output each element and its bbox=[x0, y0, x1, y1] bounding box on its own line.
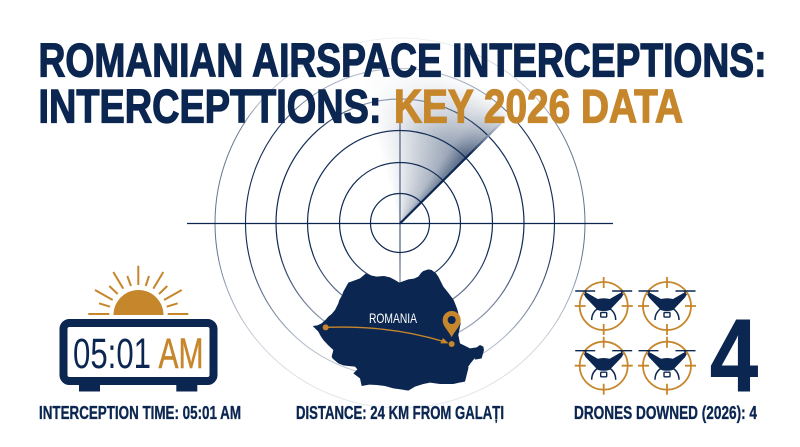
panel: distance map bbox=[296, 269, 504, 423]
icon: digital clock bbox=[64, 323, 214, 392]
radar sweep arm bbox=[400, 121, 503, 224]
route arrow bbox=[323, 324, 455, 347]
clock time digits: 05:01 bbox=[73, 330, 151, 378]
panel: drones downed bbox=[574, 277, 758, 423]
clock AM label: AM bbox=[158, 330, 204, 378]
radar horizontal axis bbox=[187, 222, 613, 224]
big number: 4 bbox=[710, 298, 758, 413]
radar rings and crosshair bbox=[215, 38, 585, 408]
icon: rising sun bbox=[88, 266, 188, 315]
icon: targeted drones bbox=[575, 277, 696, 395]
distance label: DISTANCE: 24 KM FROM GALAȚI bbox=[296, 403, 504, 423]
panel: interception time bbox=[39, 266, 241, 423]
title: INTERCEPTTIONS: bbox=[38, 80, 382, 132]
interception time label: INTERCEPTION TIME: 05:01 AM bbox=[39, 403, 241, 423]
map label: ROMANIA bbox=[369, 310, 417, 326]
radar sweep wedge bbox=[382, 79, 508, 222]
icon: location pin bbox=[443, 311, 461, 337]
map of Romania bbox=[313, 269, 484, 391]
title bbox=[38, 34, 766, 132]
title: KEY 2026 DATA bbox=[394, 80, 683, 132]
